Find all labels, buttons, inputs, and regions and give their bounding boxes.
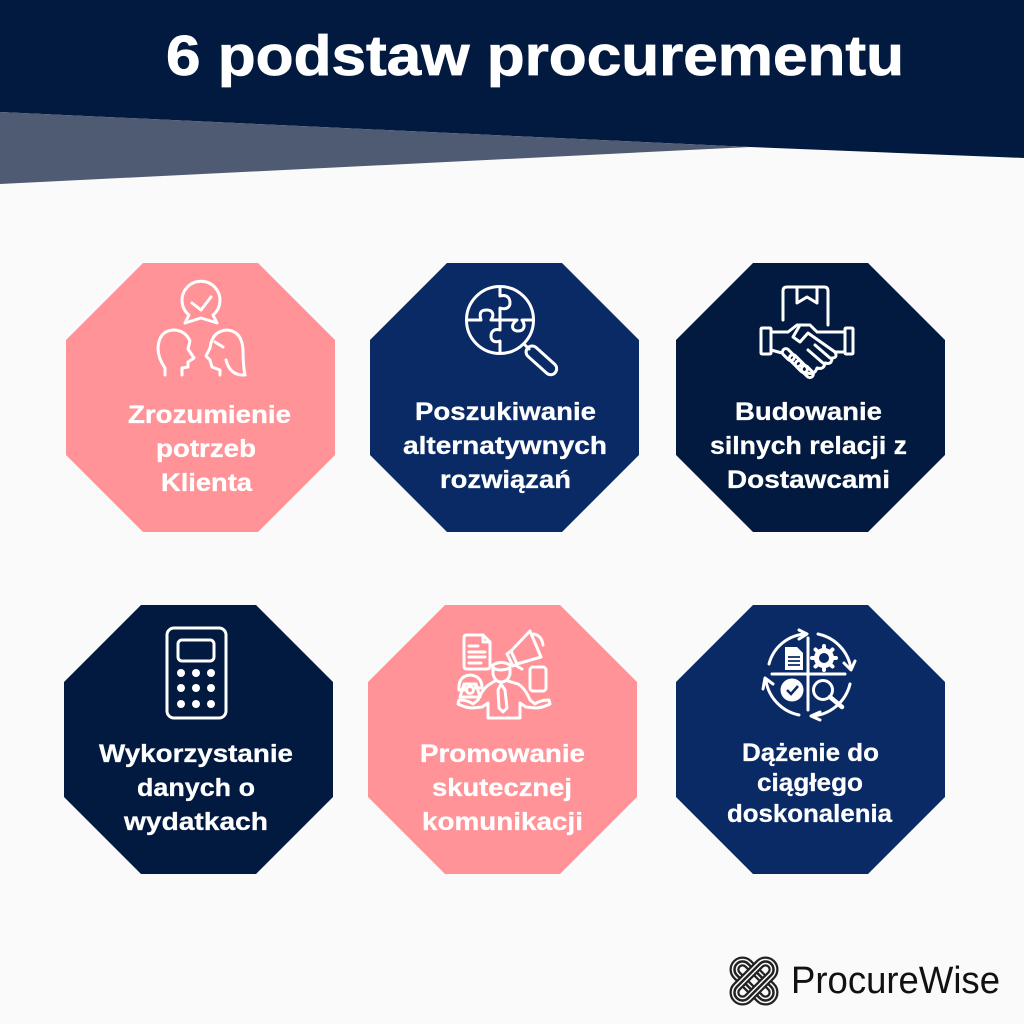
icon: two people with speech bubble xyxy=(158,281,245,375)
title: 6 podstaw procurementu xyxy=(166,24,904,88)
label: Promowanie xyxy=(420,740,585,768)
label: Wykorzystanie xyxy=(99,740,293,768)
label: rozwiązań xyxy=(440,466,571,494)
label: Dostawcami xyxy=(727,466,890,494)
logo mark: interlaced knot xyxy=(735,961,774,1001)
panel: Promowanie skutecznej komunikacji xyxy=(368,605,637,874)
label xyxy=(727,739,893,828)
label: Klienta xyxy=(161,469,253,497)
label: Budowanie xyxy=(735,398,882,426)
icon: person with communication tools xyxy=(458,631,550,718)
label: Dążenie do xyxy=(742,739,879,767)
label: alternatywnych xyxy=(403,432,607,460)
label: potrzeb xyxy=(156,435,256,463)
label xyxy=(420,740,585,836)
icon: puzzle under magnifier xyxy=(466,286,559,377)
icon: continuous improvement cycle xyxy=(763,630,855,720)
label: danych o xyxy=(137,774,255,802)
label xyxy=(128,401,291,497)
panel: Wykorzystanie danych o wydatkach xyxy=(64,605,333,874)
logo wordmark: ProcureWise xyxy=(791,960,1000,1002)
panel: Poszukiwanie alternatywnych rozwiązań xyxy=(370,263,639,532)
label xyxy=(710,398,907,494)
label: Zrozumienie xyxy=(128,401,291,429)
icon: calculator xyxy=(167,628,226,718)
label xyxy=(99,740,293,836)
label: silnych relacji z xyxy=(710,432,907,460)
label: wydatkach xyxy=(123,808,268,836)
label: doskonalenia xyxy=(727,800,893,828)
panel: Zrozumienie potrzeb Klienta xyxy=(66,263,335,532)
label: Poszukiwanie xyxy=(415,398,596,426)
label: ciągłego xyxy=(757,769,863,797)
panel: Dążenie do ciągłego doskonalenia xyxy=(676,605,945,874)
label: skutecznej xyxy=(432,774,572,802)
header band xyxy=(0,0,1024,184)
logo: ProcureWise xyxy=(735,960,1000,1002)
icon: handshake with parcel xyxy=(761,287,853,379)
label: komunikacji xyxy=(422,808,583,836)
label xyxy=(403,398,607,494)
panel: Budowanie silnych relacji z Dostawcami xyxy=(676,263,945,532)
